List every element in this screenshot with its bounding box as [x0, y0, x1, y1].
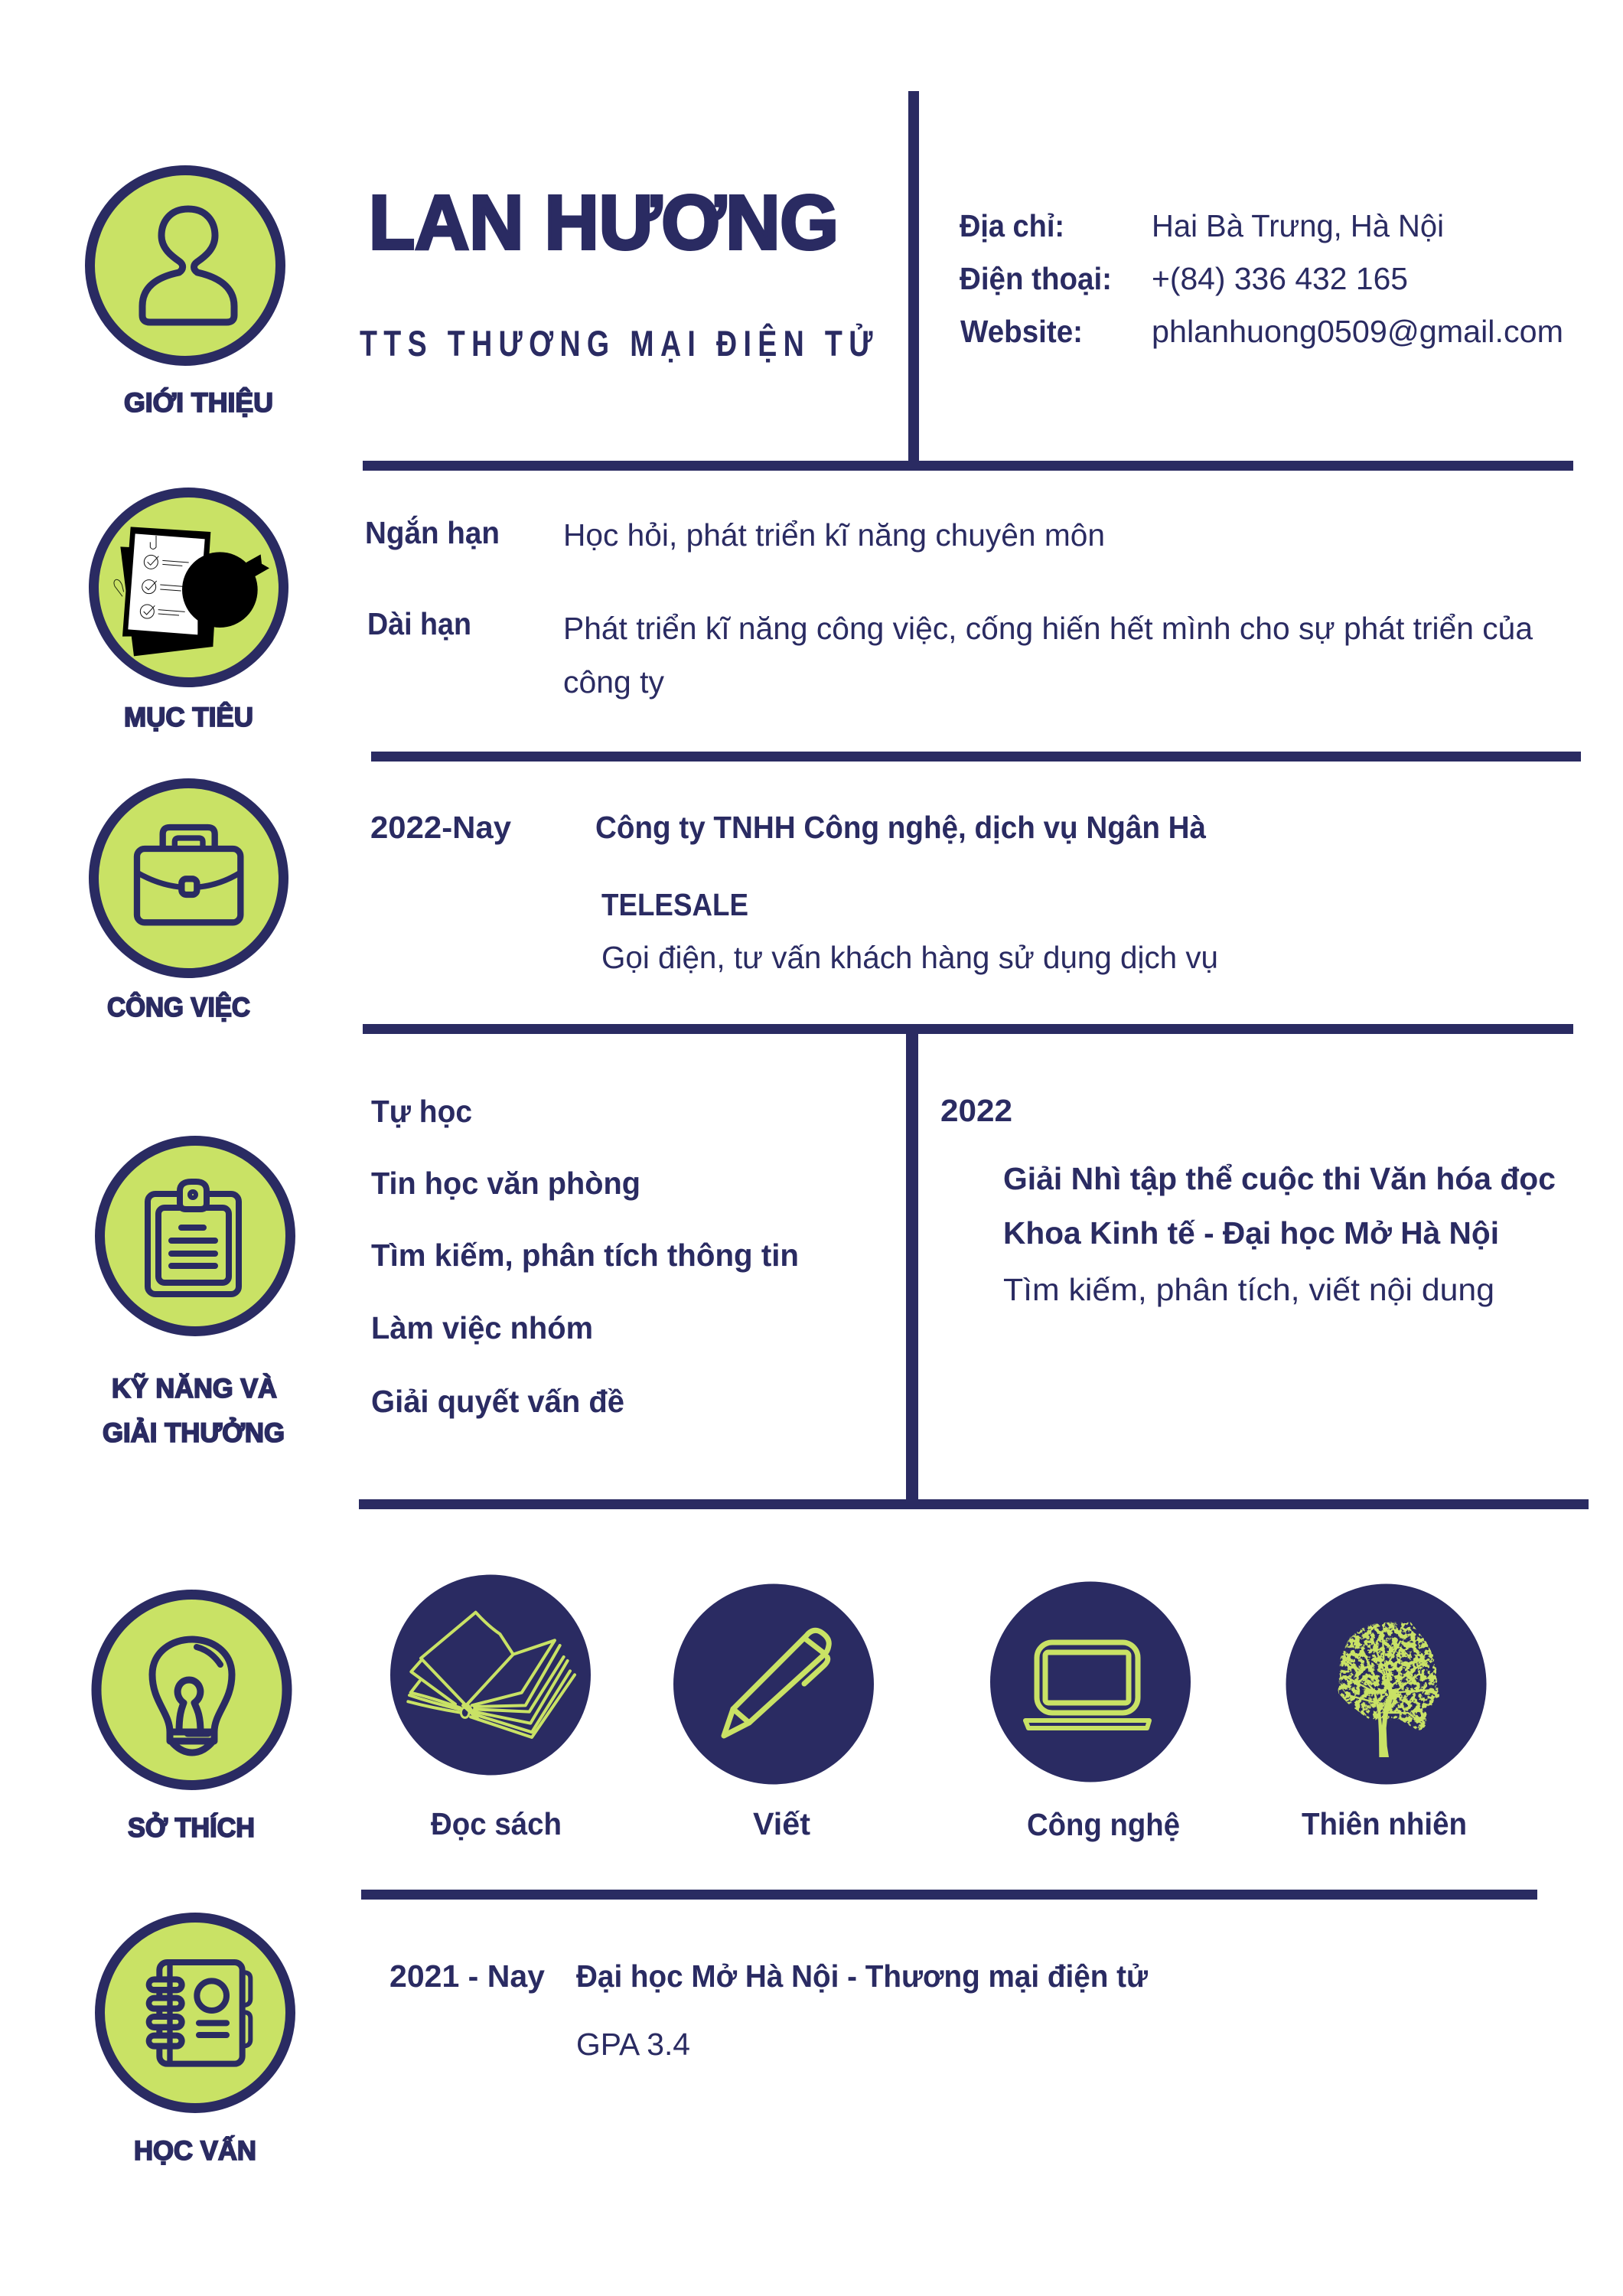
icon: light bulb badge: [96, 1595, 287, 1785]
panel: introduction section icon and label: [90, 170, 280, 418]
title: name: LAN HƯƠNG: [369, 180, 839, 266]
subtitle: job title: TTS THƯƠNG MẠI ĐIỆN TỬ: [360, 323, 873, 364]
label: technology: Công nghệ: [1027, 1807, 1180, 1842]
divider: goals bottom rule: [371, 752, 1581, 762]
text: skill 2: Tin học văn phòng: [371, 1166, 640, 1201]
label: education: HỌC VẤN: [134, 2135, 256, 2166]
text: GPA: GPA 3.4: [576, 2027, 690, 2062]
label: writing: Viết: [753, 1806, 810, 1841]
label: goals: MỤC TIÊU: [124, 702, 253, 732]
panel: goals text: [365, 515, 1533, 700]
text: long-term label: Dài hạn: [367, 606, 471, 641]
label: skills and awards: [103, 1373, 285, 1448]
text: skill 5: Giải quyết vấn đề: [371, 1384, 624, 1419]
text: long-term goal line 2: công ty: [563, 664, 664, 700]
label: intro: GIỚI THIỆU: [124, 387, 273, 418]
panel: education section icon and label: [99, 1918, 291, 2166]
divider: skills vertical rule: [906, 1029, 918, 1504]
icon: pencil: [673, 1584, 874, 1785]
label: nature: Thiên nhiên: [1302, 1806, 1467, 1841]
label: skills and awards: KỸ NĂNG VÀ: [112, 1373, 277, 1404]
icon: checklist and target badge: [93, 493, 283, 683]
text: phone label: Điện thoại:: [960, 261, 1112, 296]
divider: work bottom rule: [363, 1024, 1573, 1034]
panel: goals section icon and label: [93, 493, 283, 732]
divider: header bottom rule: [363, 461, 1573, 471]
panel: hobby nature: [1286, 1584, 1486, 1841]
label: reading: Đọc sách: [431, 1806, 562, 1841]
text: short-term goal: Học hỏi, phát triển kĩ năng chuyên môn: [563, 517, 1105, 553]
text: website label: Website:: [960, 314, 1083, 349]
text: long-term goal line 1: Phát triển kĩ năng công việc, cống hiến hết mình cho sự phát triển của: [563, 611, 1533, 646]
text: role: TELESALE: [601, 887, 748, 922]
text: award organiser: Khoa Kinh tế - Đại học Mở Hà Nội: [1003, 1215, 1499, 1251]
text: period: 2022-Nay: [370, 810, 511, 845]
panel: education text: [389, 1958, 1148, 2062]
label: skills and awards: GIẢI THƯỞNG: [103, 1417, 285, 1448]
icon: open book: [390, 1575, 591, 1776]
icon: person badge: [90, 170, 280, 361]
text: skill 4: Làm việc nhóm: [371, 1310, 593, 1345]
panel: work section icon and label: [93, 784, 283, 1022]
panel: contact details: [960, 208, 1563, 349]
label: work: CÔNG VIỆC: [107, 992, 250, 1022]
text: period: 2021 - Nay: [389, 1958, 545, 1994]
text: award description: Tìm kiếm, phân tích, viết nội dung: [1003, 1272, 1494, 1307]
icon: laptop: [990, 1581, 1191, 1782]
panel: work text: [370, 810, 1218, 975]
panel: hobbies section icon and label: [96, 1595, 287, 1843]
panel: skills section icon and label: [99, 1140, 291, 1448]
panel: hobby writing: [673, 1584, 874, 1841]
panel: hobby technology: [990, 1581, 1191, 1842]
divider: skills bottom rule: [359, 1499, 1589, 1509]
label: hobbies: SỞ THÍCH: [128, 1812, 255, 1843]
text: skill 1: Tự học: [371, 1094, 472, 1129]
panel: hobby reading: [390, 1575, 591, 1841]
panel: skills list: [371, 1094, 799, 1419]
text: phone: +(84) 336 432 165: [1152, 261, 1408, 296]
icon: clipboard badge: [99, 1140, 291, 1332]
text: address: Hai Bà Trưng, Hà Nội: [1152, 208, 1444, 243]
text: company: Công ty TNHH Công nghệ, dịch vụ Ngân Hà: [595, 810, 1206, 845]
icon: briefcase badge: [93, 784, 283, 974]
icon: tree: [1286, 1584, 1486, 1785]
divider: hobbies bottom rule: [361, 1890, 1537, 1900]
divider: header vertical rule: [908, 91, 919, 466]
text: email: phlanhuong0509@gmail.com: [1152, 314, 1563, 349]
icon: notebook badge: [99, 1918, 291, 2108]
text: skill 3: Tìm kiếm, phân tích thông tin: [371, 1238, 799, 1273]
text: award year: 2022: [940, 1093, 1012, 1128]
text: address label: Địa chỉ:: [960, 208, 1064, 243]
text: role description: Gọi điện, tư vấn khách hàng sử dụng dịch vụ: [601, 940, 1218, 975]
text: award name: Giải Nhì tập thể cuộc thi Văn hóa đọc: [1003, 1161, 1556, 1196]
text: university: Đại học Mở Hà Nội - Thương mại điện tử: [576, 1958, 1148, 1994]
panel: awards: [940, 1093, 1556, 1307]
text: short-term label: Ngắn hạn: [365, 515, 500, 550]
panel: name and job title: [360, 180, 873, 364]
